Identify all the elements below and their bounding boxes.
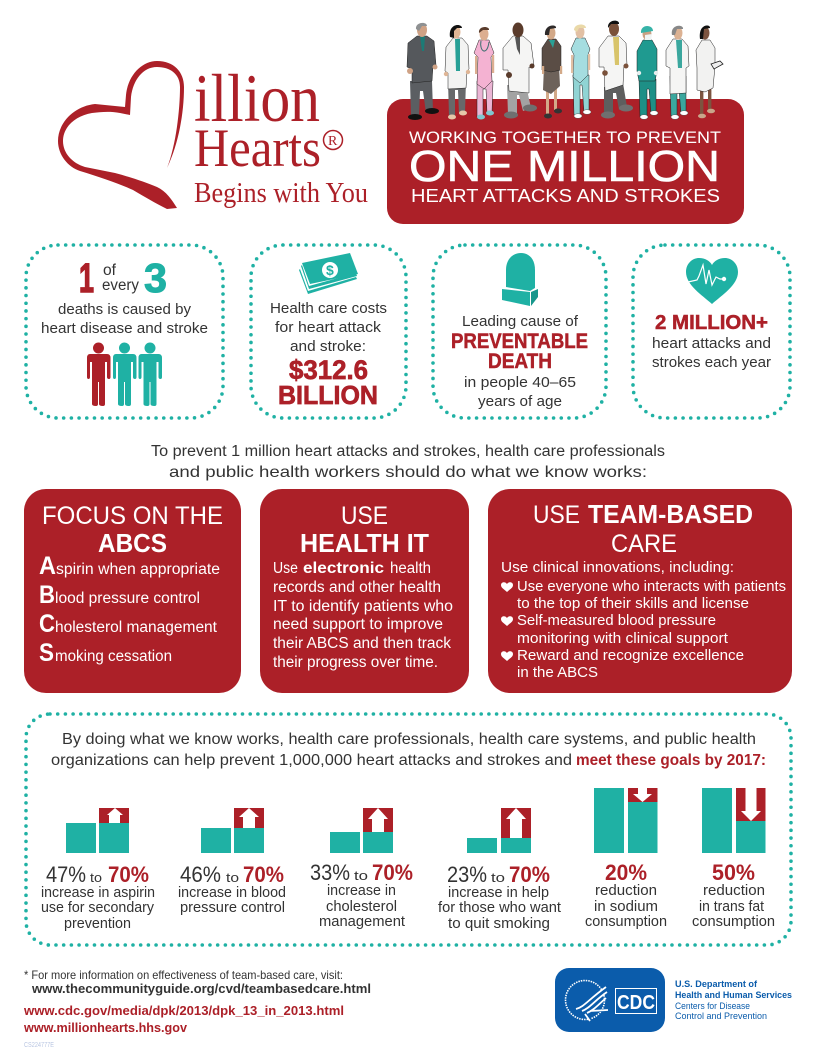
logo registered mark: R [328,134,338,149]
text: health care costs: for heart attack [275,319,382,336]
label: cholesterol goal: to [354,868,368,883]
label: sodium goal: consumption [585,914,667,930]
label: sodium goal: reduction [595,883,657,899]
body text: their ABCS and then track [273,635,451,652]
logo background [555,968,665,1032]
stat: 312.6 billion [278,355,378,410]
heading: TEAM-BASED [588,499,753,529]
label: blood pressure goal: 46% [180,862,221,887]
list: ABCS: moking cessation [55,648,172,665]
goals intro text: organizations can help prevent 1,000,000 heart attacks and strokes and [51,752,572,769]
heading: HEALTH IT [300,528,429,558]
text: HHS and CDC names: Health and Human Services [675,990,792,1000]
heading: CARE [611,530,677,558]
chart: aspirin goal [66,808,129,853]
label: quit smoking goal: for those who want [438,900,561,916]
text: health care costs [270,300,387,355]
stat: preventable death [451,330,588,373]
label: trans fat goal: reduction [703,883,765,899]
intro text: To prevent 1 million heart attacks and strokes, health care professionals [151,443,665,460]
label: sodium goal [585,860,667,930]
stat: 312.6 billion: $312.6 [289,355,368,385]
panel border [433,245,606,418]
icon: money stack [299,253,358,294]
heading: USE [533,501,580,529]
panel border [26,714,791,945]
label: blood pressure goal [178,862,286,916]
person: woman in brown suit [542,26,562,119]
label: quit smoking goal: to [491,870,505,885]
text: deaths caused by heart disease: heart disease and stroke [41,320,208,337]
label: aspirin goal: 47% [46,862,86,887]
icon: money stack: $ [326,262,334,278]
footer references: www.cdc.gov/media/dpk/2013/dpk_13_in_2013.html [23,1004,344,1018]
banner background [387,99,744,224]
body text: Use [273,560,298,577]
panel: leading cause [433,245,606,418]
label: sodium goal: 20% [605,860,647,885]
body text: electronic [303,560,384,577]
list: ABCS: lood pressure control [55,590,200,607]
label: blood pressure goal: increase in blood [178,885,286,901]
panel border [633,245,790,418]
label: cholesterol goal: 33% [310,860,350,885]
panel: goals by 2017 [26,714,791,945]
label: trans fat goal: consumption [692,914,775,930]
intro text: and public health workers should do what we know works: [169,464,647,481]
chart: trans fat goal [702,788,766,853]
bullet list: to the top of their skills and license [517,595,749,612]
panel background [24,489,241,693]
panel: 2 million [633,245,790,418]
goals intro text [51,731,766,769]
person: surgeon in teal scrubs [637,26,658,119]
panel: use health IT [260,489,469,693]
person: woman in white coat [444,25,470,120]
stat: 1 of every 3: of [103,262,117,279]
list: ABCS [39,552,220,667]
list: ABCS: B [39,581,55,609]
label: sodium goal: in sodium [594,899,658,915]
logo registered mark [324,130,342,150]
text: health care costs: and stroke: [290,338,366,355]
list: ABCS: A [39,552,56,580]
heading [300,502,429,558]
stat: 312.6 billion: BILLION [278,380,378,410]
bullet list [501,578,786,681]
text: leading cause of: Leading cause of [462,313,579,330]
body text [273,560,453,671]
intro text [151,443,665,481]
label: aspirin goal: prevention [64,916,131,932]
person: blonde woman in aqua scrubs [571,24,591,118]
label: cholesterol goal: management [319,914,405,930]
panel: focus on the ABCS [24,489,241,693]
text: deaths caused by heart disease: deaths is caused by [58,301,191,318]
label: trans fat goal: in trans fat [699,899,764,915]
stat: preventable death: DEATH [488,350,552,373]
text: in people 40-65: years of age [478,393,562,410]
footer references: * For more information on effectiveness of team-based care, visit: [24,968,343,982]
stat: 1 of every 3: every [102,277,139,294]
person: doctor with yellow tie [599,21,633,118]
heading: USE [341,502,388,530]
banner line 3: HEART ATTACKS AND STROKES [411,186,720,206]
text: in people 40-65 [464,374,576,410]
label: aspirin goal: use for secondary [41,900,155,916]
chart: cholesterol goal [330,808,393,853]
label: aspirin goal [41,862,155,932]
icon: HHS seal [566,980,608,1022]
icon: three people [87,342,162,406]
chart: quit smoking goal [467,808,531,853]
stat: 1 of every 3: 3 [144,255,167,301]
label: blood pressure goal: pressure control [180,900,285,916]
label: cholesterol goal: increase in [327,883,396,899]
footer references [23,968,371,1049]
person: doctor in white coat [503,22,537,118]
body text: health [390,560,431,577]
heading: ABCS [98,528,167,558]
body text: IT to identify patients who [273,598,453,615]
heading [533,499,753,558]
label: cholesterol goal: cholesterol [326,899,397,915]
bullet list: Reward and recognize excellence [517,647,744,664]
label: cholesterol goal [310,860,413,930]
person: nurse in pink scrubs [474,27,494,120]
person: man in grey suit [407,23,439,120]
goals intro text: By doing what we know works, health care professionals, health care systems, and public health [62,731,756,748]
banner: working together [387,99,744,224]
stat: 2 million plus: 2 MILLION+ [655,312,768,334]
banner line 2: ONE MILLION [409,142,720,191]
label: blood pressure goal: to [226,870,239,885]
person: grey-haired woman in white coat [666,26,689,119]
footer references: www.thecommunityguide.org/cvd/teambasedcare.html [31,982,371,996]
panel border [251,245,406,418]
list: ABCS: S [39,639,54,667]
illustration: row of health professionals [407,21,723,120]
label: aspirin goal: increase in aspirin [41,885,155,901]
bullet list: monitoring with clinical support [517,630,729,647]
body text: their progress over time. [273,654,438,671]
label: quit smoking goal: to quit smoking [448,916,550,932]
panel background [488,489,792,693]
panel: 1 of every 3 [26,245,223,418]
body text: need support to improve [273,616,443,633]
panel border [26,245,223,418]
text: HHS and CDC names: U.S. Department of [675,979,758,989]
label: quit smoking goal [438,862,561,932]
chart: sodium goal [594,788,658,853]
list: ABCS: C [39,610,55,638]
logo word: Hearts: Hearts [194,118,321,178]
heading [42,502,223,558]
list: ABCS: holesterol management [55,619,218,636]
label: trans fat goal: 50% [712,860,755,885]
label: trans fat goal [692,860,775,930]
logo word: illion: illion [194,60,320,136]
stat: preventable death: PREVENTABLE [451,330,588,353]
panel: health care costs [251,245,406,418]
text: HHS and CDC names [675,979,792,1021]
logo: Million Hearts Begins with You [58,60,368,209]
label: quit smoking goal: 70% [509,862,550,887]
person: woman holding tablet [696,25,723,118]
icon: heart outline [58,61,184,209]
text: in people 40-65: in people 40–65 [464,374,576,391]
label: aspirin goal: to [90,870,102,885]
heading: FOCUS ON THE [42,502,223,530]
label: quit smoking goal: increase in help [448,885,549,901]
chart: blood pressure goal [201,808,264,853]
text: HHS and CDC names: Control and Prevention [675,1011,767,1021]
body text: records and other health [273,579,441,596]
footer references: CS224777E [24,1042,54,1049]
panel: use team-based care [488,489,792,693]
text: health care costs: Health care costs [270,300,387,317]
panel background [260,489,469,693]
label: blood pressure goal: 70% [243,862,284,887]
logo tagline: Begins with You [194,178,368,209]
banner line 1: WORKING TOGETHER TO PREVENT [409,128,721,147]
footer references: www.millionhearts.hhs.gov [23,1021,187,1035]
list: ABCS: spirin when appropriate [56,561,220,578]
label: cholesterol goal: 70% [372,860,413,885]
text: HHS and CDC names: Centers for Disease [675,1001,750,1011]
stat: 1 of every 3 [79,255,167,301]
icon: heart with pulse [686,258,738,304]
goals intro text: meet these goals by 2017: [576,752,766,769]
label: aspirin goal: 70% [108,862,149,887]
text: heart attacks each year [652,335,771,371]
text: heart attacks each year: heart attacks and [652,335,771,352]
icon: gravestone [502,253,538,306]
bullet list: in the ABCS [517,664,598,681]
bullet list: Self-measured blood pressure [517,612,716,629]
text: deaths caused by heart disease [41,301,208,337]
stat: 1 of every 3: 1 [79,255,94,301]
logo: CDC mark: CDC [617,992,655,1014]
bullet list: Use everyone who interacts with patients [517,578,786,595]
text: heart attacks each year: strokes each year [652,354,771,371]
label: quit smoking goal: 23% [447,862,487,887]
logo: HHS and CDC [555,968,665,1032]
intro line: Use clinical innovations, including: [501,559,734,576]
